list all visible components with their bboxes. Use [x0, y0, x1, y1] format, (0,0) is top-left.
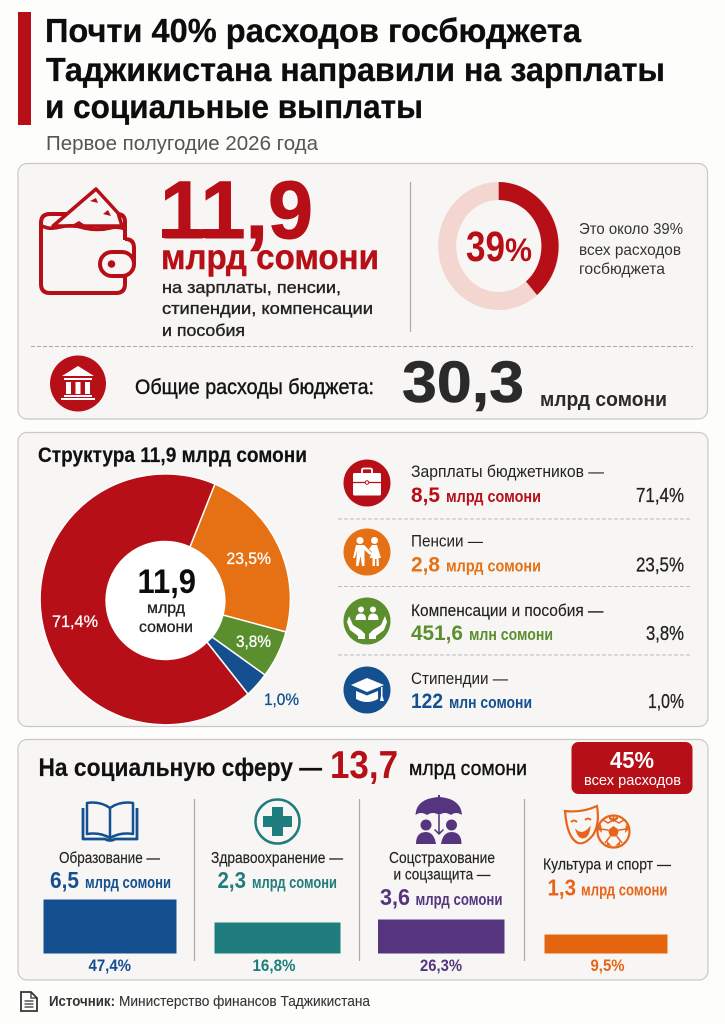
legend: compensation: Компенсации и пособия —: [411, 601, 604, 620]
description: [162, 279, 373, 340]
chart: structure donut: 71,4%: [52, 613, 98, 631]
column: healthcare: Здравоохранение —: [211, 850, 343, 867]
legend: salaries: Зарплаты бюджетников —: [411, 462, 604, 481]
description: и пособия: [162, 322, 245, 340]
legend: pensions: 23,5%: [636, 554, 684, 576]
legend: scholarships: 1,0%: [648, 691, 684, 713]
panel: structure: [18, 432, 708, 726]
chart: 39 percent donut: 39: [466, 223, 505, 271]
icon: document: [21, 992, 37, 1011]
icon: graduation cap: [344, 666, 390, 714]
column: culture and sport: 9,5%: [590, 956, 624, 975]
column: healthcare: 2,3: [218, 867, 246, 893]
column: culture and sport: Культура и спорт —: [543, 856, 671, 874]
legend: pensions: 2,8: [411, 554, 440, 576]
footer: source: Министерство финансов Таджикистана: [119, 994, 371, 1010]
column: social insurance: млрд сомони: [416, 891, 502, 909]
column: culture and sport: млрд сомони: [581, 882, 668, 900]
column: education: Образование —: [59, 850, 160, 867]
chart: structure donut: [40, 474, 299, 725]
footer: source: [21, 992, 371, 1011]
column: social insurance: и соцзащита —: [394, 866, 491, 884]
main number: 11,9: [160, 165, 313, 256]
legend: scholarships: [344, 666, 684, 714]
chart: structure donut: 23,5%: [226, 550, 271, 568]
chart: structure donut: 1,0%: [264, 691, 299, 709]
bar: healthcare: [214, 922, 340, 954]
legend: scholarships: 122: [411, 690, 443, 713]
title: Таджикистана направили на зарплаты: [46, 52, 665, 89]
legend: salaries: [344, 460, 684, 507]
heading: Структура 11,9 млрд сомони: [38, 444, 307, 467]
legend: pensions: Пенсии —: [411, 532, 483, 550]
description: на зарплаты, пенсии,: [162, 279, 341, 297]
badge: 45 percent: 45%: [610, 747, 654, 773]
column: social insurance: 26,3%: [420, 956, 462, 975]
legend: scholarships: млн сомони: [449, 693, 532, 712]
heading: [38, 744, 527, 787]
donut note: госбюджета: [579, 261, 665, 278]
main unit: млрд сомони: [161, 237, 379, 277]
header: [18, 12, 665, 155]
chart: 39 percent donut: [447, 182, 559, 301]
icon: theatre mask and ball: [565, 806, 630, 848]
icon: umbrella over people: [416, 795, 462, 844]
legend: compensation: 451,6: [411, 622, 463, 645]
icon: book: [83, 803, 137, 840]
total unit: млрд сомони: [540, 389, 667, 411]
icon: medical cross: [256, 800, 300, 844]
donut note: всех расходов: [579, 242, 681, 259]
column: education: [44, 803, 176, 975]
chart: structure donut: сомони: [139, 619, 193, 636]
bar: social insurance: [378, 920, 504, 954]
title: [45, 13, 665, 126]
title: Почти 40% расходов госбюджета: [45, 13, 581, 50]
total label: Общие расходы бюджета:: [135, 376, 374, 399]
panel: total: [18, 164, 708, 419]
icon: briefcase: [344, 460, 390, 506]
donut note: Это около 39%: [579, 221, 683, 238]
panel: social sphere: [18, 740, 708, 980]
footer: source: Источник:: [49, 994, 115, 1010]
accent bar: [18, 12, 31, 125]
badge: 45 percent: всех расходов: [584, 773, 681, 789]
legend: salaries: 8,5: [411, 484, 440, 507]
column: education: 47,4%: [88, 956, 131, 975]
column: culture and sport: 1,3: [548, 874, 576, 900]
bar: education: [44, 900, 176, 954]
legend: pensions: [344, 528, 684, 576]
heading: млрд сомони: [409, 758, 527, 780]
badge: 45 percent: [572, 742, 692, 794]
description: стипендии, компенсации: [162, 300, 373, 318]
column: education: 6,5: [50, 867, 79, 893]
legend: pensions: млрд сомони: [446, 556, 541, 576]
legend: compensation: [344, 598, 684, 645]
total number: 30,3: [402, 350, 524, 415]
legend: compensation: млн сомони: [469, 625, 553, 644]
legend: salaries: млрд сомони: [446, 487, 541, 506]
title: и социальные выплаты: [45, 89, 423, 126]
column: healthcare: млрд сомони: [252, 874, 337, 892]
column: social insurance: Соцстрахование: [389, 850, 495, 867]
chart: structure donut: 3,8%: [236, 633, 271, 651]
icon: hands with family: [344, 598, 390, 644]
chart: 39 percent donut: %: [505, 232, 532, 268]
column: social insurance: [378, 795, 504, 975]
legend: salaries: 71,4%: [636, 485, 684, 507]
chart: structure donut: млрд: [147, 600, 185, 617]
column: social insurance: 3,6: [380, 884, 410, 910]
heading: 13,7: [330, 744, 398, 787]
column: healthcare: 16,8%: [252, 956, 296, 975]
icon: bank: [50, 356, 106, 412]
column: healthcare: [211, 800, 343, 975]
subtitle: Первое полугодие 2026 года: [46, 132, 319, 155]
bar: culture and sport: [544, 934, 668, 954]
legend: compensation: 3,8%: [646, 623, 684, 645]
donut note: [579, 221, 683, 278]
column: culture and sport: [543, 806, 671, 975]
legend: scholarships: Стипендии —: [411, 669, 508, 688]
chart: structure donut: 11,9: [138, 563, 196, 601]
column: education: млрд сомони: [85, 874, 171, 892]
icon: wallet: [41, 189, 134, 293]
heading: На социальную сферу —: [38, 754, 322, 782]
icon: elderly couple: [344, 528, 390, 576]
